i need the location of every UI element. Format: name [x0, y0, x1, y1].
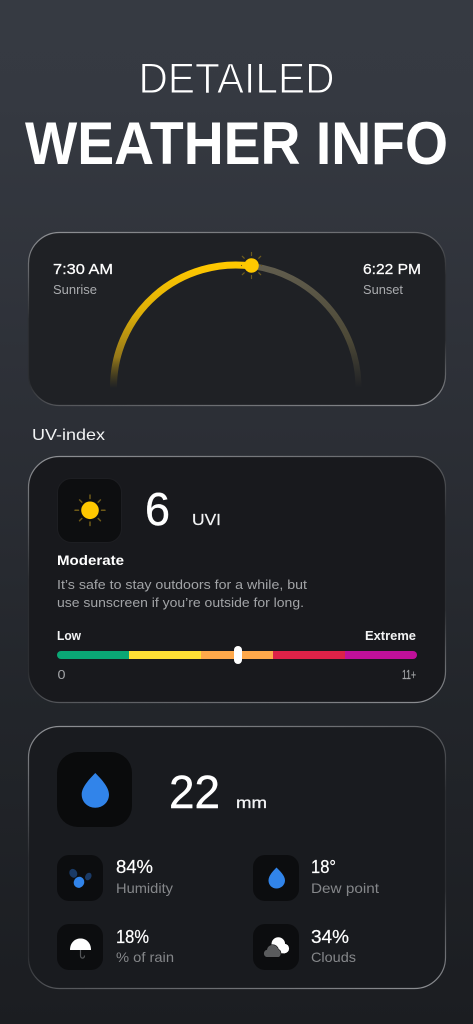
panel background [28, 726, 446, 988]
precipitation amount [169, 766, 267, 818]
uv scale: Low [57, 629, 81, 643]
stat: clouds: Clouds [311, 949, 356, 965]
stat: humidity: Humidity [116, 880, 173, 896]
stat: dew point: 18° [311, 857, 336, 877]
uv level description: It’s safe to stay outdoors for a while, but [57, 577, 307, 592]
stat: chance of rain: % of rain [116, 949, 174, 965]
heading: uv-index: UV-index [32, 427, 105, 444]
icon: umbrella [57, 924, 103, 970]
uv value: UVI [192, 512, 221, 529]
stat: humidity [57, 855, 173, 901]
stat: clouds: 34% [311, 927, 349, 947]
icon: large water drop [57, 752, 132, 827]
stat: chance of rain [57, 924, 174, 970]
stat: dew point: Dew point [311, 880, 379, 896]
stat: humidity: 84% [116, 857, 153, 877]
uv scale: 0 [58, 667, 66, 682]
panel: precipitation details [28, 726, 446, 988]
icon: clouds [253, 924, 299, 970]
precipitation amount: mm [236, 795, 267, 812]
title line: detailed: DETAILED [138, 55, 334, 103]
sunrise time: 7:30 AM [53, 261, 113, 278]
sunrise time: Sunrise [53, 282, 97, 297]
icon: sun [58, 478, 122, 542]
uv level description: use sunscreen if you’re outside for long. [57, 595, 304, 610]
uv level description: Moderate [57, 552, 124, 568]
stat: dew point [253, 855, 379, 901]
title [25, 55, 448, 177]
panel background [28, 456, 446, 702]
sunset time [363, 261, 421, 297]
sun path remaining arc [251, 266, 359, 388]
sunrise time [53, 261, 113, 297]
uv scale: Extreme [365, 629, 416, 643]
precipitation amount: 22 [169, 766, 220, 818]
panel: sunrise and sunset [28, 232, 446, 406]
title line: weather info: WEATHER INFO [25, 110, 448, 177]
scale thumb [234, 646, 242, 664]
sunset time: Sunset [363, 282, 403, 297]
sun path elapsed arc [113, 265, 251, 388]
sunset time: 6:22 PM [363, 261, 421, 278]
icon: sun position [242, 252, 262, 278]
stat: chance of rain: 18% [116, 927, 149, 947]
uv level description [57, 552, 307, 610]
panel: uv index [28, 456, 446, 702]
uv value: 6 [145, 483, 170, 535]
stat: clouds [253, 924, 356, 970]
icon: humidity drops [57, 855, 103, 901]
icon: dew drop [253, 855, 299, 901]
uv value [145, 483, 221, 535]
panel background [28, 232, 446, 406]
uv scale: 11+ [402, 667, 416, 682]
uv scale [57, 629, 417, 682]
